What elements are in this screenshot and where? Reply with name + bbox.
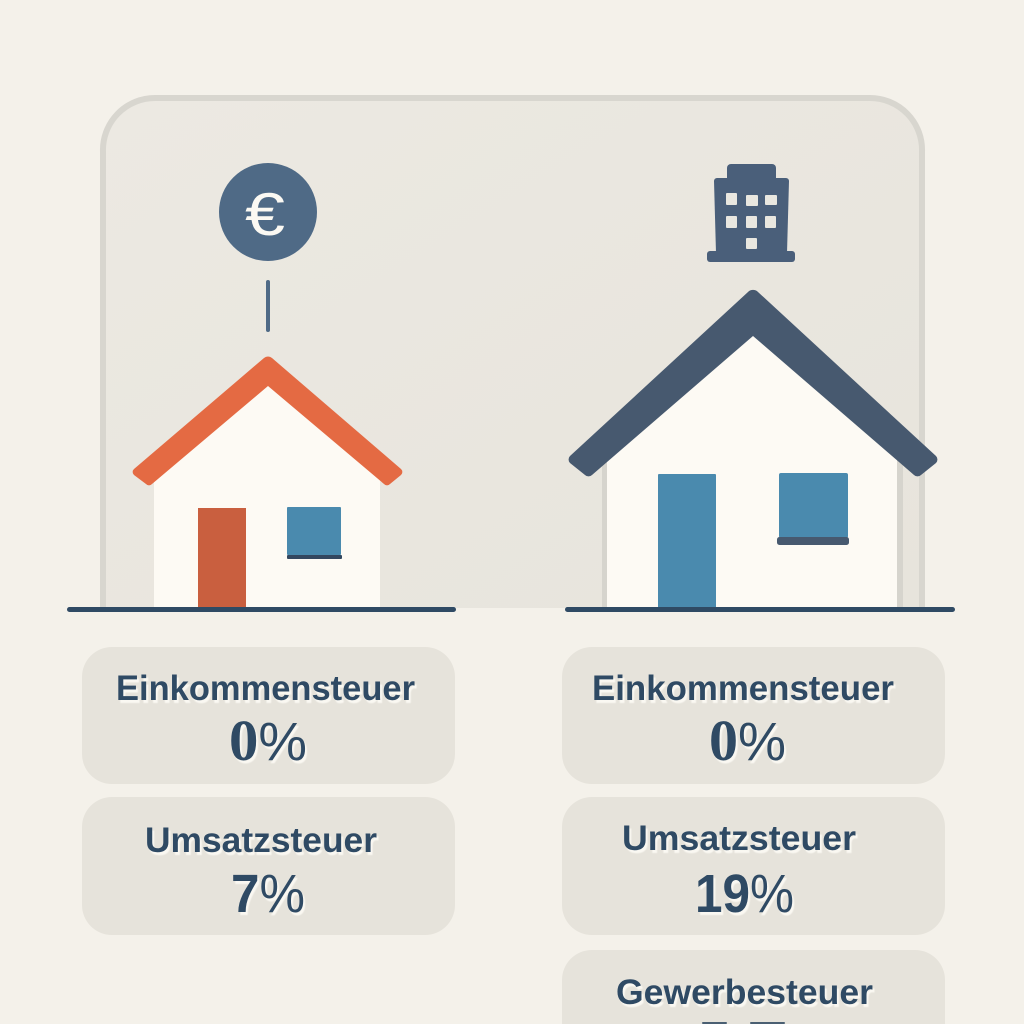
large house: navy roof (569, 290, 937, 608)
cropped value tops (702, 1022, 785, 1024)
icon: office building (707, 164, 795, 262)
card: Einkommensteuer left: Einkommensteuer (116, 669, 415, 708)
icon: euro coin: € (245, 181, 285, 248)
card: Umsatzsteuer right: 19% (695, 864, 794, 924)
card: Einkommensteuer left: 0% (229, 708, 307, 773)
panel: background frame (103, 98, 922, 608)
ground line right (565, 607, 955, 612)
card: Einkommensteuer right: 0% (709, 708, 786, 773)
card: Umsatzsteuer right (562, 797, 945, 935)
card: Einkommensteuer right: Einkommensteuer (592, 669, 894, 708)
card: Umsatzsteuer left (82, 797, 455, 935)
ground line left (67, 607, 456, 612)
small house: orange roof (133, 356, 402, 608)
card: Umsatzsteuer left: 7% (231, 864, 305, 924)
icon: euro coin (219, 163, 317, 261)
card: Einkommensteuer right (562, 647, 945, 784)
door: blue (658, 474, 716, 608)
card: Umsatzsteuer right: Umsatzsteuer (622, 819, 856, 858)
connector line (266, 280, 270, 332)
card: Gewerbesteuer right (cropped at bottom) (562, 950, 945, 1024)
window: blue with sill (777, 473, 849, 545)
card: Gewerbesteuer right (cropped at bottom): Gewerbesteuer (616, 973, 873, 1012)
door: orange (198, 508, 246, 608)
card: Einkommensteuer left (82, 647, 455, 784)
card: Umsatzsteuer left: Umsatzsteuer (145, 821, 377, 860)
window: blue (287, 507, 342, 559)
